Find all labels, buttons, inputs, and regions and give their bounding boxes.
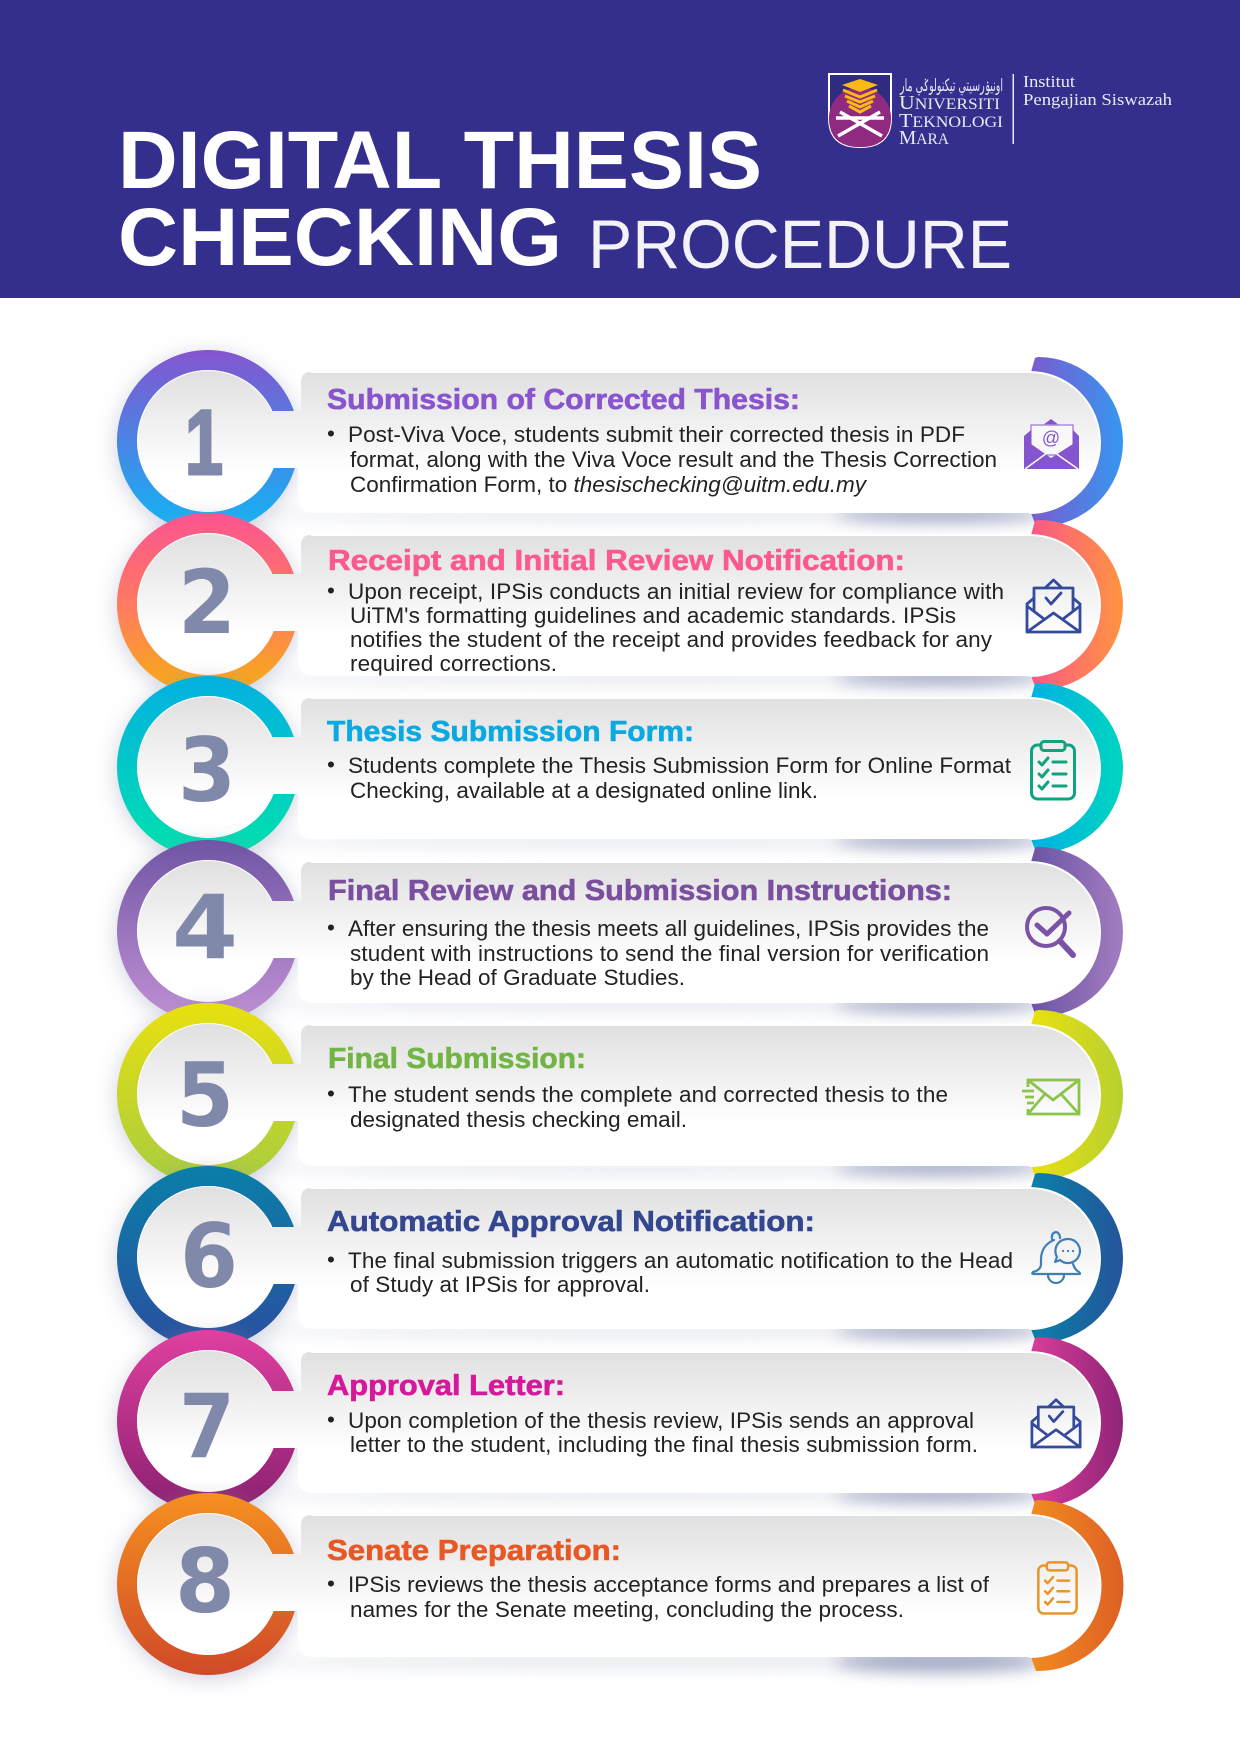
left ring [117, 350, 295, 532]
body text: UiTM's formatting guidelines and academic standards. IPSis [350, 603, 956, 628]
heading: Submission of Corrected Thesis: [327, 384, 800, 416]
body text: Confirmation Form, to thesischecking@uitm.edu.my [350, 472, 868, 497]
icon: envelope check [1027, 580, 1080, 632]
body text [327, 1081, 948, 1132]
card [262, 1515, 1100, 1657]
university name [899, 76, 1003, 149]
body text: of Study at IPSis for approval. [350, 1272, 650, 1297]
icon: clipboard checklist [1038, 1562, 1077, 1614]
university name: UNIVERSITI [899, 92, 1000, 114]
body text: format, along with the Viva Voce result and the Thesis Correction [350, 447, 997, 472]
left ring [117, 840, 295, 1022]
step 4 [117, 840, 1123, 1026]
institute name [1023, 72, 1173, 109]
right arc [1031, 1010, 1123, 1180]
body text: IPSis reviews the thesis acceptance forms and prepares a list of [348, 1572, 990, 1597]
body text: notifies the student of the receipt and provides feedback for any [350, 627, 993, 652]
left ring [117, 1330, 295, 1512]
body text: The final submission triggers an automatic notification to the Head [348, 1248, 1013, 1273]
number: 3 [178, 719, 236, 822]
left ring [117, 1166, 295, 1348]
body text: • [327, 1407, 335, 1432]
card [262, 1025, 1100, 1166]
body text: letter to the student, including the final thesis submission form. [350, 1432, 978, 1457]
icon: magnifier check [1027, 908, 1073, 955]
body text: Post-Viva Voce, students submit their corrected thesis in PDF [348, 422, 965, 447]
card [262, 862, 1100, 1003]
heading: Final Submission: [328, 1043, 586, 1075]
body text: required corrections. [350, 651, 557, 676]
step 7 [117, 1330, 1123, 1516]
step 6 [117, 1166, 1123, 1352]
body text: • [327, 1081, 335, 1106]
number: 6 [180, 1205, 238, 1308]
body text: student with instructions to send the final version for verification [350, 941, 989, 966]
body text: • [327, 915, 335, 940]
left ring [117, 513, 295, 695]
university name: اونيۏرسيتي تيكنولوݢي مار [899, 76, 1003, 96]
body text: designated thesis checking email. [350, 1107, 687, 1132]
right arc [1031, 1500, 1124, 1671]
card [262, 1188, 1100, 1329]
body text: Students complete the Thesis Submission Form for Online Format [348, 753, 1012, 778]
right arc [1031, 1173, 1123, 1343]
body text [327, 1571, 990, 1622]
logo: UiTM Institut Pengajian Siswazah [829, 72, 1173, 149]
body text: The student sends the complete and corrected thesis to the [348, 1082, 948, 1107]
card [262, 535, 1100, 676]
right arc [1031, 683, 1123, 853]
title: PROCEDURE [588, 206, 1012, 283]
icon: clipboard checklist [1032, 742, 1074, 799]
body text: Upon completion of the thesis review, IPSis sends an approval [348, 1408, 974, 1433]
number: 2 [178, 551, 236, 654]
body text [327, 421, 997, 497]
body text [327, 1407, 978, 1457]
body text [327, 578, 1004, 676]
step 2 [117, 513, 1123, 699]
heading: Automatic Approval Notification: [327, 1206, 815, 1238]
body text [327, 752, 1012, 803]
body text: • [327, 1247, 335, 1272]
icon: sent envelope [1022, 1080, 1079, 1114]
right arc [1031, 520, 1123, 690]
number: 7 [179, 1375, 235, 1478]
step 3 [117, 676, 1123, 862]
body text: • [327, 1571, 335, 1596]
right arc [1031, 357, 1123, 527]
university name: MARA [899, 127, 949, 149]
heading: Final Review and Submission Instructions: [328, 875, 952, 907]
icon: envelope check [1032, 1400, 1080, 1447]
number: 4 [172, 876, 238, 979]
icon: crest shield [829, 74, 891, 149]
number: 1 [185, 392, 223, 494]
card [262, 372, 1100, 513]
body text: by the Head of Graduate Studies. [350, 965, 685, 990]
title: CHECKING [118, 192, 562, 283]
right arc [1031, 1337, 1123, 1507]
body text: names for the Senate meeting, concluding the process. [350, 1597, 904, 1622]
body text [327, 915, 989, 990]
number: 8 [175, 1530, 235, 1633]
university name: TEKNOLOGI [899, 110, 1003, 132]
heading: Approval Letter: [327, 1370, 565, 1402]
left ring [117, 676, 295, 858]
title [118, 115, 1012, 283]
body text: • [327, 752, 335, 777]
institute name: Institut [1023, 72, 1075, 91]
body text: Checking, available at a designated online link. [350, 778, 818, 803]
body text [327, 1247, 1013, 1297]
icon: email at [1024, 419, 1079, 469]
header banner [0, 0, 1240, 298]
institute name: Pengajian Siswazah [1023, 90, 1173, 109]
heading: Senate Preparation: [327, 1535, 621, 1567]
body text: After ensuring the thesis meets all guidelines, IPSis provides the [348, 916, 989, 941]
icon: email at: @ [1042, 428, 1060, 448]
heading: Receipt and Initial Review Notification: [328, 545, 905, 577]
left ring [117, 1493, 295, 1675]
card [262, 1352, 1100, 1493]
step 1 [117, 350, 1123, 536]
title: DIGITAL THESIS [118, 115, 762, 206]
step 5 [117, 1003, 1123, 1189]
body text: • [327, 578, 335, 603]
step 8 [117, 1493, 1123, 1679]
right arc [1031, 847, 1123, 1017]
body text: Upon receipt, IPSis conducts an initial review for compliance with [348, 579, 1004, 604]
body text: • [327, 421, 335, 446]
card [262, 698, 1100, 839]
number: 5 [176, 1044, 234, 1147]
left ring [117, 1003, 295, 1185]
heading: Thesis Submission Form: [327, 716, 694, 748]
icon: bell with chat bubble [1032, 1232, 1080, 1283]
